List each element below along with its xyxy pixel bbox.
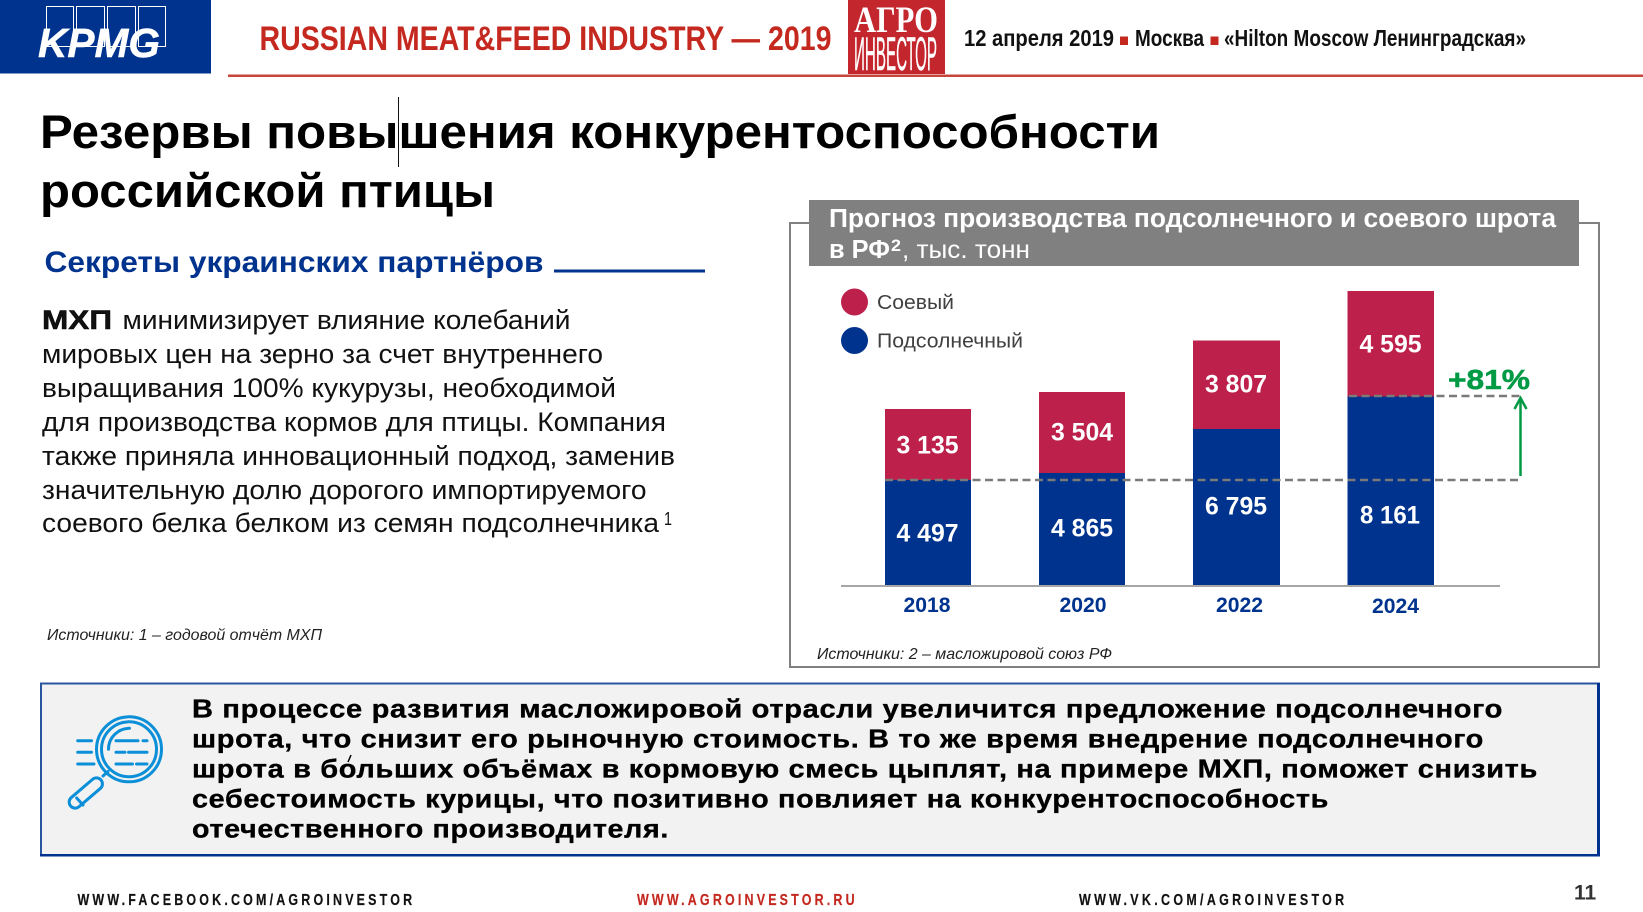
bar 2024: 8 161 bbox=[1360, 502, 1420, 530]
year labels: 2020 bbox=[1060, 594, 1106, 617]
callout text: шрота, что снизит его рыночную стоимость. В то же время внедрение подсолнечного bbox=[192, 724, 1484, 754]
event date and venue bbox=[964, 25, 1526, 51]
chart heading bbox=[809, 200, 1579, 266]
text block: MHP description bbox=[42, 305, 675, 538]
bar 2022: 6 795 bbox=[1205, 492, 1267, 520]
event date and venue: «Hilton Moscow Ленинградская» bbox=[1224, 25, 1526, 51]
logo: Agroinvestor bbox=[848, 0, 945, 80]
text block: MHP description: соевого белка белком из семян подсолнечника bbox=[42, 508, 659, 538]
text block: MHP description: для производства кормов для птицы. Компания bbox=[42, 407, 666, 437]
conference title: RUSSIAN MEAT&FEED INDUSTRY — 2019 bbox=[260, 20, 832, 58]
text block: MHP description: значительную долю дорогого импортируемого bbox=[42, 475, 646, 505]
text block: MHP description: минимизирует влияние колебаний bbox=[122, 305, 570, 335]
callout bbox=[40, 683, 1600, 856]
page number: 11 bbox=[1574, 882, 1597, 904]
bar 2020: 3 504 bbox=[1051, 418, 1113, 446]
source note left: Источники: 1 – годовой отчёт МХП bbox=[47, 627, 322, 644]
callout text: шрота в больших объёмах в кормовую смесь цыплят, на примере МХП, поможет снизить bbox=[192, 754, 1538, 784]
logo: KPMG bbox=[0, 0, 211, 74]
title bbox=[40, 97, 1160, 217]
text block: MHP description: выращивания 100% кукурузы, необходимой bbox=[42, 373, 616, 403]
legend: Соевый bbox=[877, 292, 954, 314]
year labels: 2018 bbox=[904, 594, 951, 617]
logo: Agroinvestor: АГРО bbox=[854, 0, 938, 41]
callout text: себестоимость курицы, что позитивно повлияет на конкурентоспособность bbox=[192, 784, 1329, 814]
callout text: В процессе развития масложировой отрасли увеличится предложение подсолнечного bbox=[192, 694, 1503, 724]
text block: MHP description: также приняла инновационный подход, заменив bbox=[42, 441, 675, 471]
chart heading: 2 bbox=[891, 236, 901, 255]
text block: MHP description: МХП bbox=[42, 305, 112, 335]
growth arrow bbox=[1514, 398, 1526, 476]
header band: ИНВЕСТОР bbox=[854, 27, 937, 80]
event date and venue: 12 апреля 2019 bbox=[964, 25, 1114, 51]
growth label: +81% bbox=[1448, 364, 1530, 395]
bar 2024: 4 595 bbox=[1360, 330, 1422, 358]
footer links: WWW.AGROINVESTOR.RU bbox=[637, 892, 855, 909]
header band bbox=[0, 0, 1643, 80]
bar 2022 bbox=[1193, 340, 1280, 585]
chart heading: , тыс. тонн bbox=[902, 236, 1030, 264]
callout text bbox=[192, 694, 1538, 844]
source note right: Источники: 2 – масложировой союз РФ bbox=[817, 646, 1112, 663]
bar 2018: 4 497 bbox=[896, 520, 958, 548]
year labels: 2024 bbox=[1372, 595, 1419, 618]
icon: magnifying glass bbox=[67, 717, 162, 811]
bar 2018 bbox=[885, 409, 971, 585]
footer links: WWW.FACEBOOK.COM/AGROINVESTOR bbox=[78, 892, 413, 909]
subheading: Секреты украинских партнёров bbox=[44, 246, 544, 279]
stacked bar chart bbox=[841, 291, 1521, 618]
chart heading: в РФ bbox=[829, 236, 890, 264]
bar 2020: 4 865 bbox=[1051, 514, 1113, 542]
footer links: WWW.VK.COM/AGROINVESTOR bbox=[1079, 892, 1345, 909]
title: Резервы повышения конкурентоспособности bbox=[40, 105, 1160, 158]
event date and venue: Москва bbox=[1135, 25, 1204, 51]
title: российской птицы bbox=[40, 164, 495, 217]
year labels: 2022 bbox=[1216, 594, 1263, 617]
bar 2022: 3 807 bbox=[1205, 370, 1267, 398]
chart heading: Прогноз производства подсолнечного и соевого шрота bbox=[829, 205, 1557, 233]
logo: KPMG: KPMG bbox=[38, 20, 160, 66]
text block: MHP description: 1 bbox=[664, 509, 672, 529]
bar 2020 bbox=[1039, 392, 1125, 585]
year labels bbox=[904, 594, 1419, 618]
legend bbox=[841, 288, 1023, 354]
text block: MHP description: мировых цен на зерно за счет внутреннего bbox=[42, 339, 603, 369]
legend: Подсолнечный bbox=[877, 330, 1023, 352]
footer links bbox=[78, 892, 1345, 909]
bar 2018: 3 135 bbox=[896, 432, 959, 460]
bar 2024 bbox=[1348, 291, 1434, 585]
panel: sunflower and soybean meal forecast bbox=[790, 200, 1599, 667]
callout text: отечественного производителя. bbox=[192, 814, 669, 844]
